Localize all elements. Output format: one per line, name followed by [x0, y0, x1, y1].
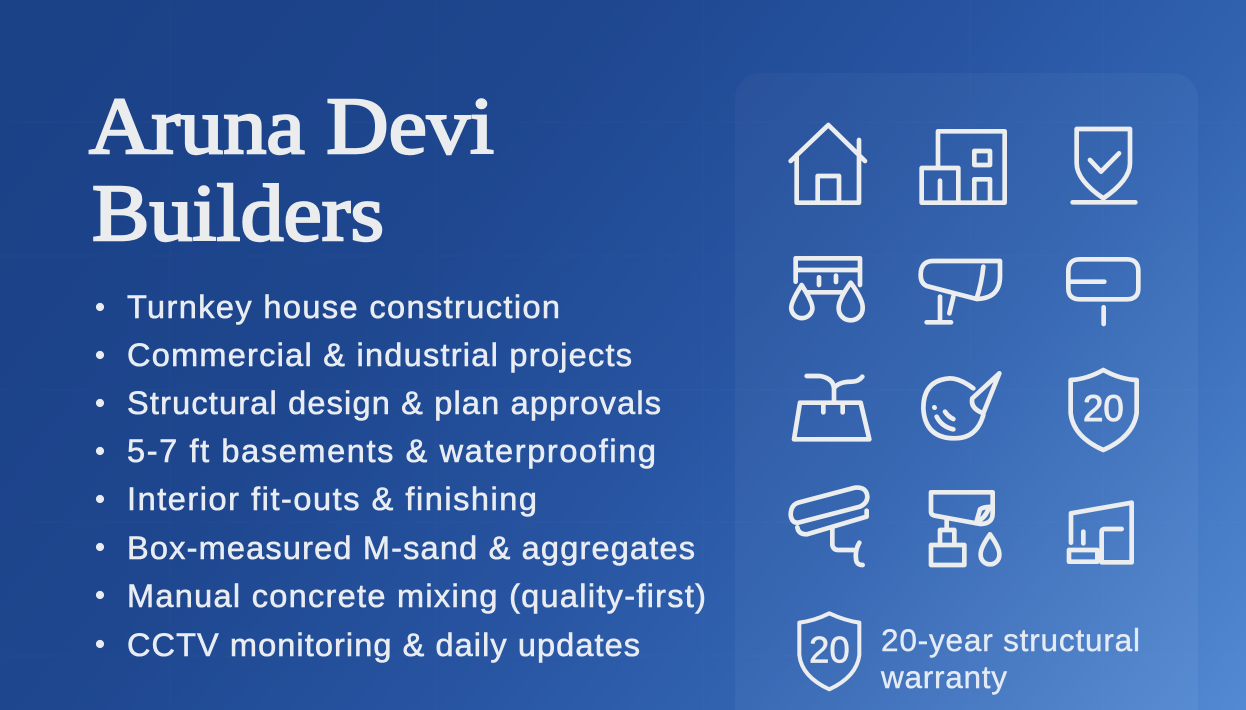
service list: Commercial & industrial projects — [127, 337, 632, 373]
service list: Turnkey house construction — [127, 289, 560, 325]
service list: CCTV monitoring & daily updates — [127, 627, 640, 663]
icon: interior fit-out — [1069, 503, 1132, 562]
icon: camera on post — [921, 261, 1000, 322]
icon: house — [791, 125, 865, 203]
warranty badge — [799, 613, 859, 689]
icon: CCTV camera — [791, 488, 867, 565]
icon: buildings — [922, 131, 1005, 203]
icon row 1 and 2 — [791, 125, 1138, 324]
title — [89, 81, 494, 258]
icon: shield check — [1073, 129, 1135, 202]
service list: 5-7 ft basements & waterproofing — [127, 433, 656, 469]
title: Aruna Devi — [89, 81, 494, 171]
panel: icon grid — [735, 73, 1198, 710]
icon: warranty shield: 20 — [809, 629, 850, 670]
icon: waterproofing drops — [791, 258, 863, 320]
icon: paint roller — [1068, 259, 1138, 324]
warranty text: 20-year structural — [881, 622, 1140, 658]
icon: round mixer — [923, 373, 999, 438]
icon: camera with drop — [931, 492, 999, 565]
service list: Structural design & plan approvals — [127, 385, 661, 421]
icon: foundation with pipes — [794, 376, 869, 439]
service list: Interior fit-outs & finishing — [127, 481, 537, 517]
icon: 20 shield: 20 — [1083, 388, 1124, 429]
icon: 20 shield — [1071, 370, 1137, 450]
service list — [96, 289, 706, 663]
title: Builders — [92, 168, 384, 258]
warranty text — [880, 622, 1140, 695]
service list: Manual concrete mixing (quality-first) — [127, 578, 706, 614]
service list: Box-measured M-sand & aggregates — [127, 530, 695, 566]
icon row 3 and 4 — [791, 370, 1137, 565]
warranty text: warranty — [880, 659, 1007, 695]
